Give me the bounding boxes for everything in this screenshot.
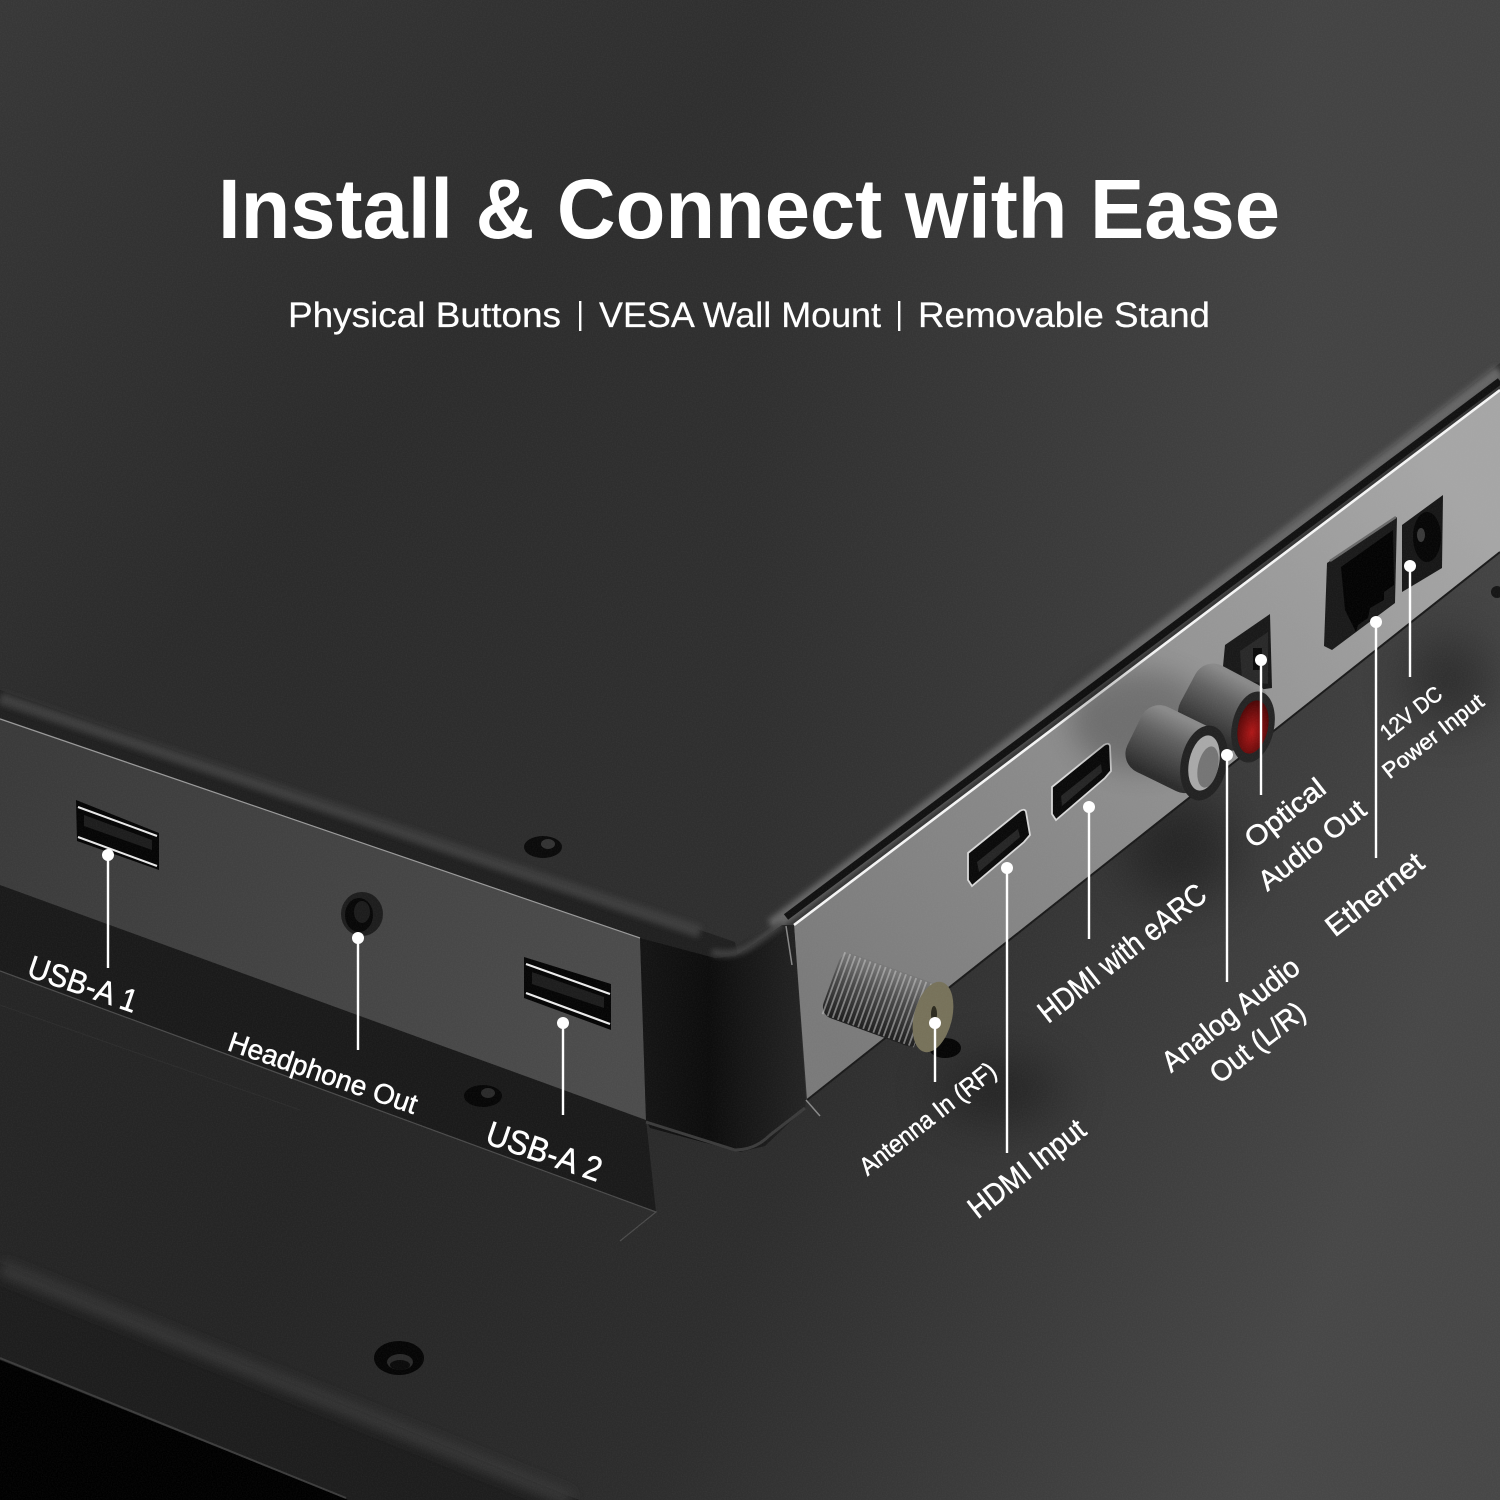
left rim: [0, 690, 740, 965]
icon: optical audio port: [1222, 614, 1272, 690]
icon: red RCA jack: [1171, 656, 1281, 767]
callout: HDMI Input: [962, 862, 1093, 1225]
icon: HDMI eARC port: [1052, 744, 1111, 820]
left port panel: [0, 718, 646, 1120]
callout: 12V DC Power Input: Power Input: [1377, 689, 1489, 783]
callout: HDMI with eARC: [1031, 801, 1213, 1030]
subtitle: Physical Buttons: [288, 296, 561, 335]
icon: DC power jack: [1402, 495, 1443, 592]
callout: Ethernet: [1319, 616, 1431, 943]
corner block: [640, 924, 820, 1152]
callout: Analog Audio Out (L/R): [1156, 749, 1312, 1090]
callout: Ethernet: Ethernet: [1319, 847, 1431, 943]
callout: Optical Audio Out: Audio Out: [1252, 793, 1372, 897]
icon: white RCA jack: [1119, 698, 1234, 805]
callout: Analog Audio Out (L/R): Out (L/R): [1204, 996, 1312, 1090]
callout: HDMI with eARC: HDMI with eARC: [1031, 876, 1213, 1030]
right rim: [745, 363, 1500, 950]
partial screw at right edge: [1491, 586, 1500, 598]
subtitle: Removable Stand: [918, 296, 1210, 335]
callout: USB-A 1: USB-A 1: [23, 948, 143, 1020]
title: Install & Connect with Ease: [218, 162, 1280, 256]
icon: port USB-A 2: [524, 957, 611, 1030]
callout: Headphone Out: [224, 932, 422, 1120]
bottom screw: [374, 1341, 424, 1375]
callout: HDMI Input: HDMI Input: [962, 1113, 1093, 1225]
callout: 12V DC Power Input: 12V DC: [1375, 681, 1447, 745]
icon: port USB-A 1: [76, 800, 159, 870]
right port panel: [794, 390, 1500, 1100]
icon: headphone jack: [341, 892, 383, 936]
callout: Optical Audio Out: [1238, 654, 1372, 897]
icon: antenna RF connector: [820, 950, 961, 1058]
bottom-left lip and black edge: [0, 1263, 580, 1500]
callout: USB-A 2: USB-A 2: [481, 1115, 607, 1189]
icon: HDMI input port: [968, 810, 1030, 886]
callout: USB-A 1: [23, 849, 143, 1020]
callout: Analog Audio Out (L/R): Analog Audio: [1156, 951, 1306, 1079]
dark recessed strip below left panel: [0, 880, 656, 1241]
callout: Headphone Out: Headphone Out: [224, 1026, 422, 1120]
callout: Optical Audio Out: Optical: [1238, 772, 1332, 854]
small screw on top surface: [524, 836, 562, 858]
small screw near USB-A 2: [464, 1085, 502, 1107]
soft shadows under the connectors: [940, 640, 1490, 1120]
callout: USB-A 2: [481, 1017, 607, 1189]
subtitle: VESA Wall Mount: [599, 296, 881, 335]
icon: ethernet port: [1324, 517, 1397, 650]
callout: Antenna In (RF): Antenna In (RF): [854, 1057, 1002, 1181]
callout: 12V DC Power Input: [1375, 560, 1489, 783]
top surface of the display back: [0, 0, 1500, 945]
subtitle: [288, 296, 1210, 335]
shadow around RCA jacks on the panel: [1070, 670, 1210, 770]
